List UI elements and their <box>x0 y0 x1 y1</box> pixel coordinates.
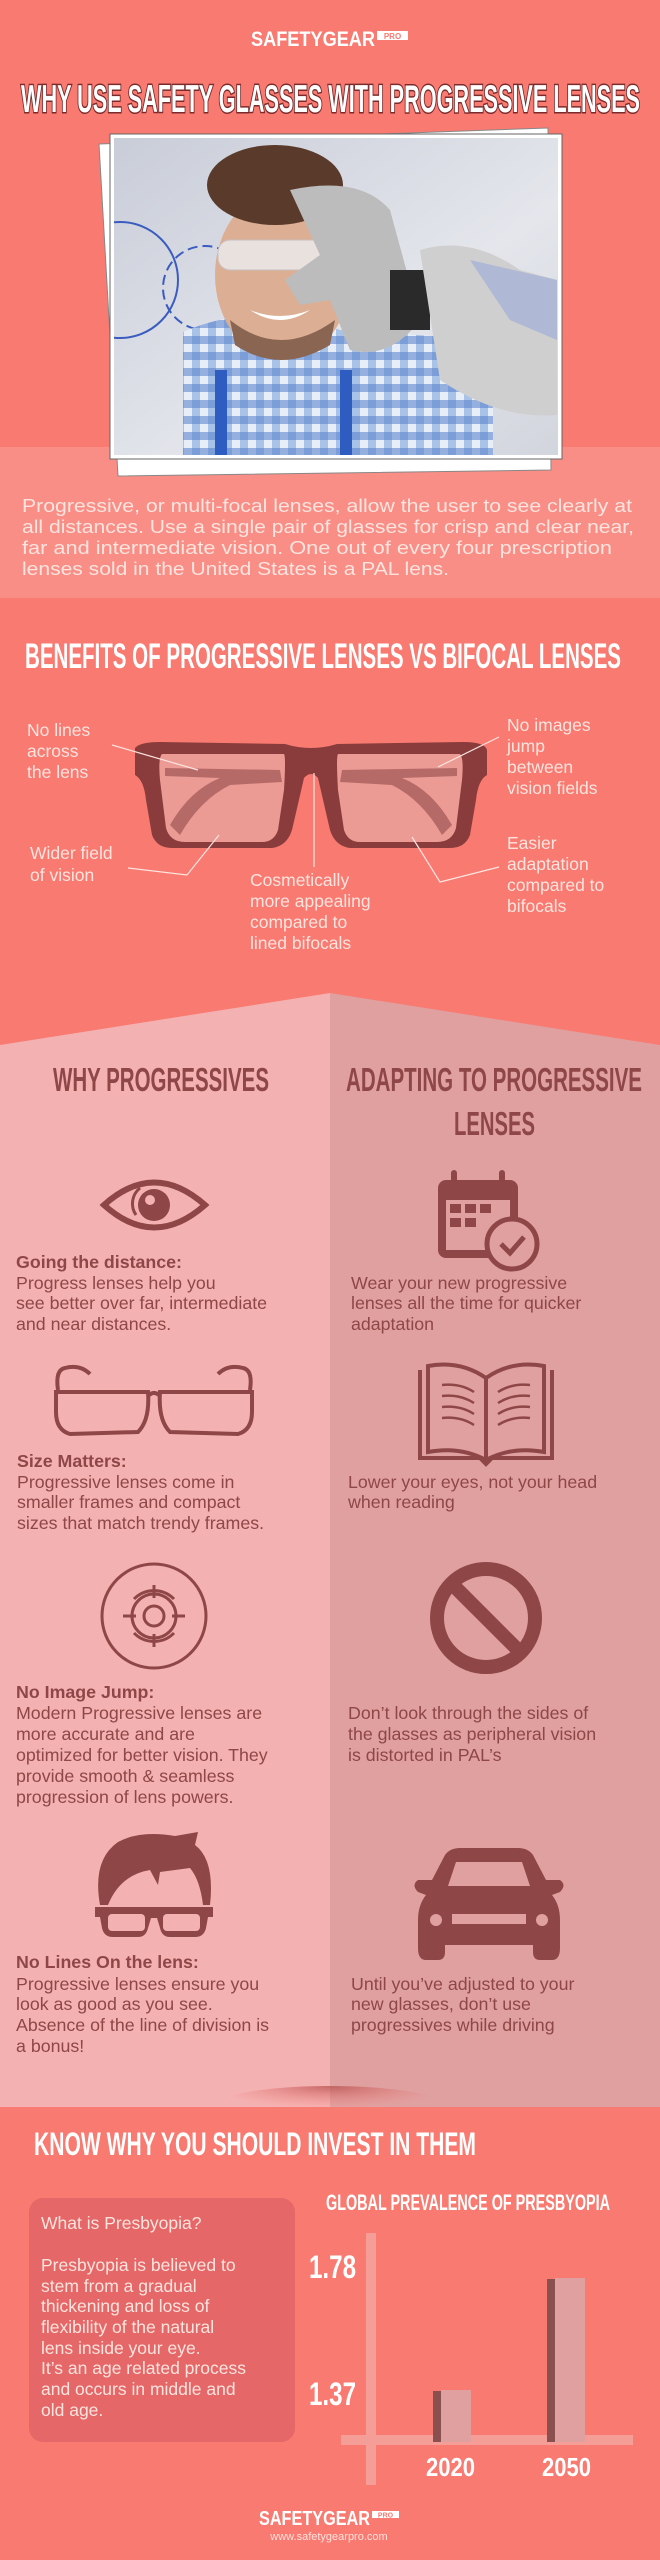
panel: what is presbyopia: flexibility of the natural <box>41 2317 214 2337</box>
text: no image jump: optimized for better vision. They <box>16 1745 268 1765</box>
panel: what is presbyopia: old age. <box>41 2400 103 2420</box>
text: no lines on lens <box>16 1952 269 2056</box>
text: size matters: Progressive lenses come in <box>17 1472 234 1492</box>
icon: book <box>420 1364 552 1464</box>
callout: cosmetically: compared to <box>250 912 347 932</box>
callout: cosmetically: Cosmetically <box>250 870 349 890</box>
text: size matters <box>17 1451 264 1533</box>
callout: no lines: the lens <box>27 762 89 782</box>
text: don't look: the glasses as peripheral vision <box>348 1724 596 1744</box>
callout lines <box>112 737 499 882</box>
icon: glasses outline <box>56 1367 252 1434</box>
text: until adjusted: new glasses, don’t use <box>351 1994 531 2014</box>
callout: no lines: No lines <box>27 720 90 740</box>
text: lower eyes: when reading <box>347 1492 455 1512</box>
heading: adapting: LENSES <box>454 1105 535 1142</box>
logo top: SAFETYGEAR <box>251 28 375 51</box>
panel: what is presbyopia: lens inside your eye. <box>41 2338 201 2358</box>
icon: no sign <box>437 1569 535 1667</box>
logo footer: SAFETYGEAR <box>259 2508 370 2530</box>
text: going the distance <box>16 1252 267 1334</box>
photo <box>62 128 562 476</box>
text: no image jump <box>16 1682 268 1807</box>
text: until adjusted: progressives while driving <box>351 2015 555 2035</box>
text: going the distance: Going the distance: <box>16 1252 182 1272</box>
text: size matters: smaller frames and compact <box>17 1492 240 1512</box>
text: no lines on lens: No Lines On the lens: <box>16 1952 199 1972</box>
icon: head with glasses <box>95 1832 213 1937</box>
text: no image jump: more accurate and are <box>16 1724 195 1744</box>
panel: what is presbyopia: stem from a gradual <box>41 2276 197 2296</box>
callout: cosmetically <box>250 870 371 953</box>
callout: wider field: Wider field <box>30 843 113 863</box>
text: no lines on lens: Absence of the line of division is <box>16 2015 269 2035</box>
intro paragraph <box>22 495 634 579</box>
icon: eye <box>104 1182 205 1228</box>
icon: calendar <box>438 1170 537 1269</box>
icon: car <box>414 1848 564 1960</box>
callout: cosmetically: lined bifocals <box>250 933 351 953</box>
glasses illustration <box>135 742 487 848</box>
callout: no lines: across <box>27 741 79 761</box>
panel: what is presbyopia: What is Presbyopia? <box>41 2213 202 2233</box>
text: no image jump: Modern Progressive lenses are <box>16 1703 262 1723</box>
logo top: PRO <box>384 32 401 41</box>
panel: what is presbyopia: Presbyopia is believed to <box>41 2255 236 2275</box>
intro band background <box>0 447 660 598</box>
callout: wider field <box>30 843 113 885</box>
text: no image jump: provide smooth & seamless <box>16 1766 235 1786</box>
text: no lines on lens: a bonus! <box>16 2036 84 2056</box>
panel: what is presbyopia: and occurs in middle and <box>41 2379 236 2399</box>
callout: no images jump: between <box>507 757 573 777</box>
intro paragraph: all distances. Use a single pair of glasses for crisp and clear near, <box>22 516 634 537</box>
text: don't look: Don’t look through the sides of <box>348 1703 588 1723</box>
text: wear <box>351 1273 581 1334</box>
heading: why progressives: WHY PROGRESSIVES <box>53 1061 269 1098</box>
callout: cosmetically: more appealing <box>250 891 371 911</box>
callout: easier adaptation: adaptation <box>507 854 589 874</box>
callout: easier adaptation: compared to <box>507 875 604 895</box>
panel: two columns <box>0 993 660 2107</box>
logo footer: www.safetygearpro.com <box>269 2531 388 2543</box>
text: no image jump: progression of lens powers. <box>16 1787 233 1807</box>
text: lower eyes: Lower your eyes, not your head <box>348 1472 597 1492</box>
text: wear: lenses all the time for quicker <box>351 1293 581 1313</box>
intro paragraph: far and intermediate vision. One out of every four prescription <box>22 537 612 558</box>
chart: global prevalence of presbyopia: 2020 <box>426 2452 475 2482</box>
text: don't look: is distorted in PAL’s <box>348 1745 502 1765</box>
text: until adjusted <box>351 1974 574 2035</box>
text: no lines on lens: look as good as you see. <box>16 1994 213 2014</box>
heading: adapting <box>346 1061 642 1142</box>
callout: easier adaptation: Easier <box>507 833 557 853</box>
chart: global prevalence of presbyopia: 1.78 <box>309 2249 356 2285</box>
icon: target <box>102 1564 206 1668</box>
text: going the distance: Progress lenses help you <box>16 1273 216 1293</box>
text: going the distance: and near distances. <box>16 1314 171 1334</box>
callout: easier adaptation: bifocals <box>507 896 567 916</box>
text: lower eyes <box>347 1472 597 1512</box>
callout: no images jump: jump <box>506 736 545 756</box>
text: no lines on lens: Progressive lenses ensure you <box>16 1974 259 1994</box>
text: don't look <box>348 1703 596 1765</box>
panel: what is presbyopia: It’s an age related process <box>41 2358 246 2378</box>
text: going the distance: see better over far, intermediate <box>16 1293 267 1313</box>
callout: no images jump: No images <box>507 715 591 735</box>
panel: what is presbyopia: thickening and loss of <box>41 2296 209 2316</box>
intro paragraph: lenses sold in the United States is a PAL lens. <box>22 558 449 579</box>
text: wear: adaptation <box>351 1314 434 1334</box>
chart: global prevalence of presbyopia: 1.37 <box>309 2376 356 2412</box>
logo footer: PRO <box>378 2512 394 2520</box>
callout: no images jump: vision fields <box>507 778 598 798</box>
chart: global prevalence of presbyopia <box>309 2190 633 2485</box>
callout: no lines <box>27 720 90 782</box>
intro paragraph: Progressive, or multi-focal lenses, allow the user to see clearly at <box>22 495 632 516</box>
chart: global prevalence of presbyopia: 2050 <box>542 2452 591 2482</box>
callout: wider field: of vision <box>30 865 94 885</box>
callout: no images jump <box>506 715 598 798</box>
panel: what is presbyopia <box>29 2198 295 2442</box>
text: wear: Wear your new progressive <box>351 1273 567 1293</box>
logo footer <box>259 2508 399 2543</box>
text: size matters: Size Matters: <box>17 1451 127 1471</box>
callout: easier adaptation <box>507 833 604 916</box>
text: until adjusted: Until you’ve adjusted to your <box>351 1974 574 1994</box>
text: size matters: sizes that match trendy frames. <box>17 1513 264 1533</box>
text: no image jump: No Image Jump: <box>16 1682 154 1702</box>
